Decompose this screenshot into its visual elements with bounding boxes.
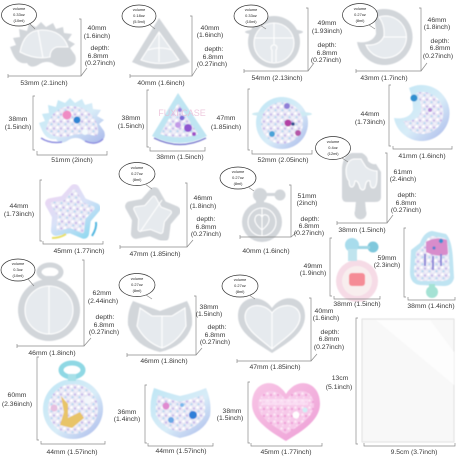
dimensions: cat mold: (1.5inch) (196, 311, 222, 318)
dimensions: watermelon shaker: (1.5inch) (118, 123, 144, 130)
volume bubble: hedgehog: 0.33oz (13, 12, 25, 17)
dimensions: heart mold: depth: (321, 329, 340, 336)
dimensions: hedgehog mold: 53mm (2.1inch) (20, 80, 68, 87)
dimensions: watermelon mold: 40mm (1.6inch) (137, 80, 185, 87)
volume bubble: star: 0.27oz (131, 171, 143, 176)
volume bubble: watch (1, 259, 35, 286)
dimensions: star shaker: (1.73inch) (4, 211, 34, 218)
volume bubble: hedgehog: (10ml) (13, 18, 25, 23)
watermark: FUXI CASE (158, 108, 206, 118)
dimensions: perfume mold: 6.8mm (299, 223, 320, 230)
dimensions: moon shaker: (1.73inch) (355, 119, 385, 126)
dimensions: cat shaker: 36mm (118, 409, 137, 416)
mold: crescent moon (357, 9, 413, 65)
dimensions: perfume mold: (0.27inch) (294, 230, 324, 237)
dimensions: watch shaker (2, 357, 105, 456)
volume bubble: perfume: (8ml) (234, 181, 243, 186)
dimensions: cat shaker: 44mm (1.57inch) (156, 448, 206, 455)
volume bubble: cat: 0.27oz (131, 282, 143, 287)
dimensions: heart mold: 47mm (1.85inch) (250, 364, 300, 371)
volume bubble: cat (119, 274, 155, 299)
dimensions: perfume mold: 40mm (1.6inch) (242, 248, 290, 255)
dimensions: watch mold: depth: (96, 314, 115, 321)
dimensions: watch shaker: (2.36inch) (2, 401, 32, 408)
shaker: popsicle (410, 231, 454, 298)
dimensions: watch mold (17, 260, 119, 357)
dimensions: popsicle shaker (404, 228, 455, 310)
dimensions: acrylic sheet: 13cm (332, 375, 349, 382)
dimensions: popsicle shaker: 38mm (1.4inch) (407, 303, 455, 310)
volume bubble: hedgehog: volume (13, 6, 25, 11)
shaker: hedgehog (39, 98, 105, 143)
shaker: star (47, 187, 97, 238)
dimensions: perfume shaker: (2.3inch) (374, 262, 400, 269)
shaker: perfume bottle (336, 238, 378, 302)
dimensions: watch mold: (0.27inch) (89, 329, 119, 336)
dimensions: round mold: (0.27inch) (311, 57, 341, 64)
dimensions: popsicle mold: 61mm (394, 169, 413, 176)
dimensions: cat mold: 6.8mm (205, 332, 226, 339)
dimensions: watch mold: 46mm (1.8inch) (28, 350, 76, 357)
dimensions: perfume shaker (300, 238, 400, 308)
dimensions: popsicle mold (337, 153, 421, 234)
shaker: cat (150, 388, 210, 438)
clear acrylic sheet (362, 319, 454, 442)
dimensions: watch shaker: 44mm (1.57inch) (46, 449, 98, 456)
dimensions: cat mold: 38mm (200, 304, 219, 311)
mold: hedgehog (10, 22, 76, 67)
dimensions: watch mold: 62mm (93, 290, 112, 297)
volume bubble: watermelon: (5.5ml) (133, 19, 146, 24)
dimensions: moon mold: depth: (431, 38, 450, 45)
volume bubble: round: volume (245, 7, 257, 12)
dimensions: star mold: 6.8mm (196, 224, 217, 231)
dimensions: star mold: 47mm (1.85inch) (130, 251, 180, 258)
dimensions: watch mold: 6.8mm (94, 322, 115, 329)
dimensions: star mold: 46mm (194, 195, 213, 202)
dimensions: round mold: 49mm (318, 20, 337, 27)
dimensions: cat mold (127, 296, 230, 365)
mold: perfume bottle (242, 188, 286, 242)
dimensions: heart mold (237, 298, 344, 371)
volume bubble: heart (222, 275, 258, 299)
dimensions: watermelon mold (130, 16, 227, 87)
volume bubble: cat: (8ml) (133, 288, 142, 293)
dimensions: acrylic sheet: 9.5cm (3.7inch) (391, 449, 437, 456)
dimensions: perfume mold: depth: (301, 216, 320, 223)
volume bubble: watermelon (122, 5, 156, 29)
volume bubble: perfume: volume (232, 169, 244, 174)
dimensions: perfume shaker: 59mm (378, 255, 397, 262)
shaker: pocket watch (43, 363, 103, 439)
volume bubble: heart: (8ml) (236, 289, 245, 294)
dimensions: moon mold: 6.8mm (430, 45, 451, 52)
dimensions: hedgehog mold: 6.8mm (88, 53, 109, 60)
mold: watermelon slice (132, 18, 190, 69)
volume bubble: moon: (8ml) (356, 18, 365, 23)
volume bubble: star: volume (131, 165, 143, 170)
volume bubble: popsicle: volume (327, 139, 339, 144)
mold: round with ears (245, 16, 303, 68)
volume bubble: round (234, 5, 268, 29)
volume bubble: watch: 0.3oz (13, 267, 23, 272)
dimensions: moon mold: 43mm (1.7inch) (360, 75, 408, 82)
dimensions: watermelon shaker: 47mm (217, 115, 236, 122)
shaker: round with ears (252, 97, 312, 149)
dimensions: cat mold: 46mm (1.8inch) (140, 358, 188, 365)
dimensions: round mold: (1.93inch) (312, 28, 342, 35)
dimensions: hedgehog mold: depth: (91, 45, 110, 52)
dimensions: acrylic sheet (326, 318, 455, 456)
volume bubble: heart: volume (234, 277, 246, 282)
volume bubble: moon (342, 4, 378, 29)
dimensions: watermelon mold: (0.27inch) (197, 61, 227, 68)
dimensions: star shaker: 44mm (10, 203, 29, 210)
dimensions: round mold: 54mm (2.13inch) (252, 75, 302, 82)
volume bubble: perfume: 0.27oz (232, 175, 244, 180)
volume bubble: star: (8ml) (133, 177, 142, 182)
volume bubble: watch: volume (12, 261, 24, 266)
dimensions: star shaker: 45mm (1.77inch) (54, 248, 104, 255)
volume bubble: watermelon: volume (133, 7, 145, 12)
dimensions: hedgehog shaker (5, 96, 107, 164)
dimensions: cat mold: depth: (208, 324, 227, 331)
volume bubble: perfume (220, 167, 256, 191)
volume bubble: moon: 0.27oz (354, 12, 366, 17)
dimensions: popsicle mold: (2.4inch) (390, 176, 416, 183)
dimensions: hedgehog shaker: 38mm (9, 116, 28, 123)
dimensions: perfume mold: (2inch) (297, 200, 317, 207)
dimensions: watermelon mold: depth: (205, 46, 224, 53)
dimensions: hedgehog mold: 40mm (88, 25, 107, 32)
dimensions: heart shaker (248, 382, 322, 456)
dimensions: star mold: (0.27inch) (191, 231, 221, 238)
dimensions: popsicle mold: (0.27inch) (391, 207, 421, 214)
dimensions: star mold: (1.8inch) (190, 203, 216, 210)
dimensions: cat mold: (0.27inch) (200, 339, 230, 346)
dimensions: star mold: depth: (197, 216, 216, 223)
dimensions: cat shaker: 38mm (223, 408, 242, 415)
dimensions: hedgehog shaker: 51mm (2inch) (51, 157, 93, 164)
dimensions: moon shaker (355, 85, 452, 160)
volume bubble: round: (10ml) (245, 19, 257, 24)
dimensions: moon shaker: 41mm (1.6inch) (398, 153, 446, 160)
volume bubble: heart: 0.27oz (234, 283, 246, 288)
volume bubble: moon: volume (354, 6, 366, 11)
dimensions: round mold: 6.8mm (317, 50, 338, 57)
dimensions: hedgehog shaker: (1.5inch) (5, 124, 31, 131)
volume bubble: watch: (10ml) (12, 273, 24, 278)
dimensions: cat shaker (114, 385, 243, 455)
shaker: moon (394, 85, 450, 141)
dimensions: watch shaker: 60mm (8, 392, 27, 399)
mold: heart (238, 298, 305, 353)
volume bubble: hedgehog (2, 4, 36, 29)
dimensions: heart mold: (1.6inch) (313, 315, 339, 322)
dimensions: heart mold: 6.8mm (319, 336, 340, 343)
volume bubble: star (119, 162, 155, 189)
dimensions: heart shaker: 45mm (1.77inch) (260, 449, 312, 456)
dimensions: moon mold: 46mm (428, 17, 447, 24)
dimensions: round shaker: 52mm (2.05inch) (258, 157, 308, 164)
dimensions: heart mold: 40mm (315, 308, 334, 315)
dimensions: round mold: depth: (318, 42, 337, 49)
dimensions: perfume shaker: (1.9inch) (300, 270, 326, 277)
dimensions: watch mold: (2.44inch) (88, 298, 118, 305)
dimensions: round shaker (248, 89, 312, 164)
dimensions: watermelon mold: 6.8mm (203, 54, 224, 61)
volume bubble: watermelon: 0.18oz (133, 13, 145, 18)
dimensions: star mold (120, 183, 221, 258)
dimensions: moon mold: (1.8inch) (424, 24, 450, 31)
volume bubble: popsicle: (12ml) (327, 151, 339, 156)
mold: star (127, 190, 177, 238)
dimensions: watermelon mold: (1.6inch) (197, 32, 223, 39)
shaker: heart (252, 383, 320, 441)
dimensions: star shaker (4, 180, 104, 255)
dimensions: perfume shaker: 49mm (304, 263, 323, 270)
dimensions: acrylic sheet: (5.1inch) (326, 384, 352, 391)
volume bubble: popsicle (316, 136, 350, 162)
dimensions: perfume mold: 51mm (298, 193, 317, 200)
dimensions: watermelon shaker: (1.85inch) (211, 124, 241, 131)
dimensions: moon mold (356, 8, 453, 82)
dimensions: watermelon shaker (118, 90, 241, 161)
dimensions: perfume shaker: 38mm (1.5inch) (333, 301, 381, 308)
dimensions: watermelon shaker: 38mm (122, 115, 141, 122)
mold: cat (128, 301, 192, 352)
dimensions: hedgehog mold (8, 19, 115, 87)
volume bubble: cat: volume (131, 276, 143, 281)
dimensions: moon mold: (0.27inch) (423, 53, 453, 60)
dimensions: perfume mold (240, 185, 324, 255)
dimensions: round mold (244, 8, 342, 82)
dimensions: cat shaker: (1.4inch) (114, 416, 140, 423)
dimensions: cat shaker: (1.5inch) (217, 415, 243, 422)
volume bubble: round: 0.33oz (245, 13, 257, 18)
shaker: watermelon (152, 93, 207, 144)
volume bubble: popsicle: 0.4oz (328, 145, 338, 150)
dimensions: hedgehog mold: (1.6inch) (84, 33, 110, 40)
mold: popsicle (342, 153, 381, 219)
dimensions: popsicle mold: 38mm (1.5inch) (338, 227, 386, 234)
dimensions: watermelon mold: 40mm (201, 25, 220, 32)
dimensions: popsicle mold: 6.8mm (396, 200, 417, 207)
dimensions: watermelon shaker: 38mm (1.5inch) (156, 154, 204, 161)
dimensions: moon shaker: 44mm (361, 111, 380, 118)
dimensions: hedgehog mold: (0.27inch) (85, 60, 115, 67)
dimensions: heart mold: (0.27inch) (314, 344, 344, 351)
dimensions: popsicle mold: depth: (398, 192, 417, 199)
mold: pocket watch (18, 265, 80, 341)
